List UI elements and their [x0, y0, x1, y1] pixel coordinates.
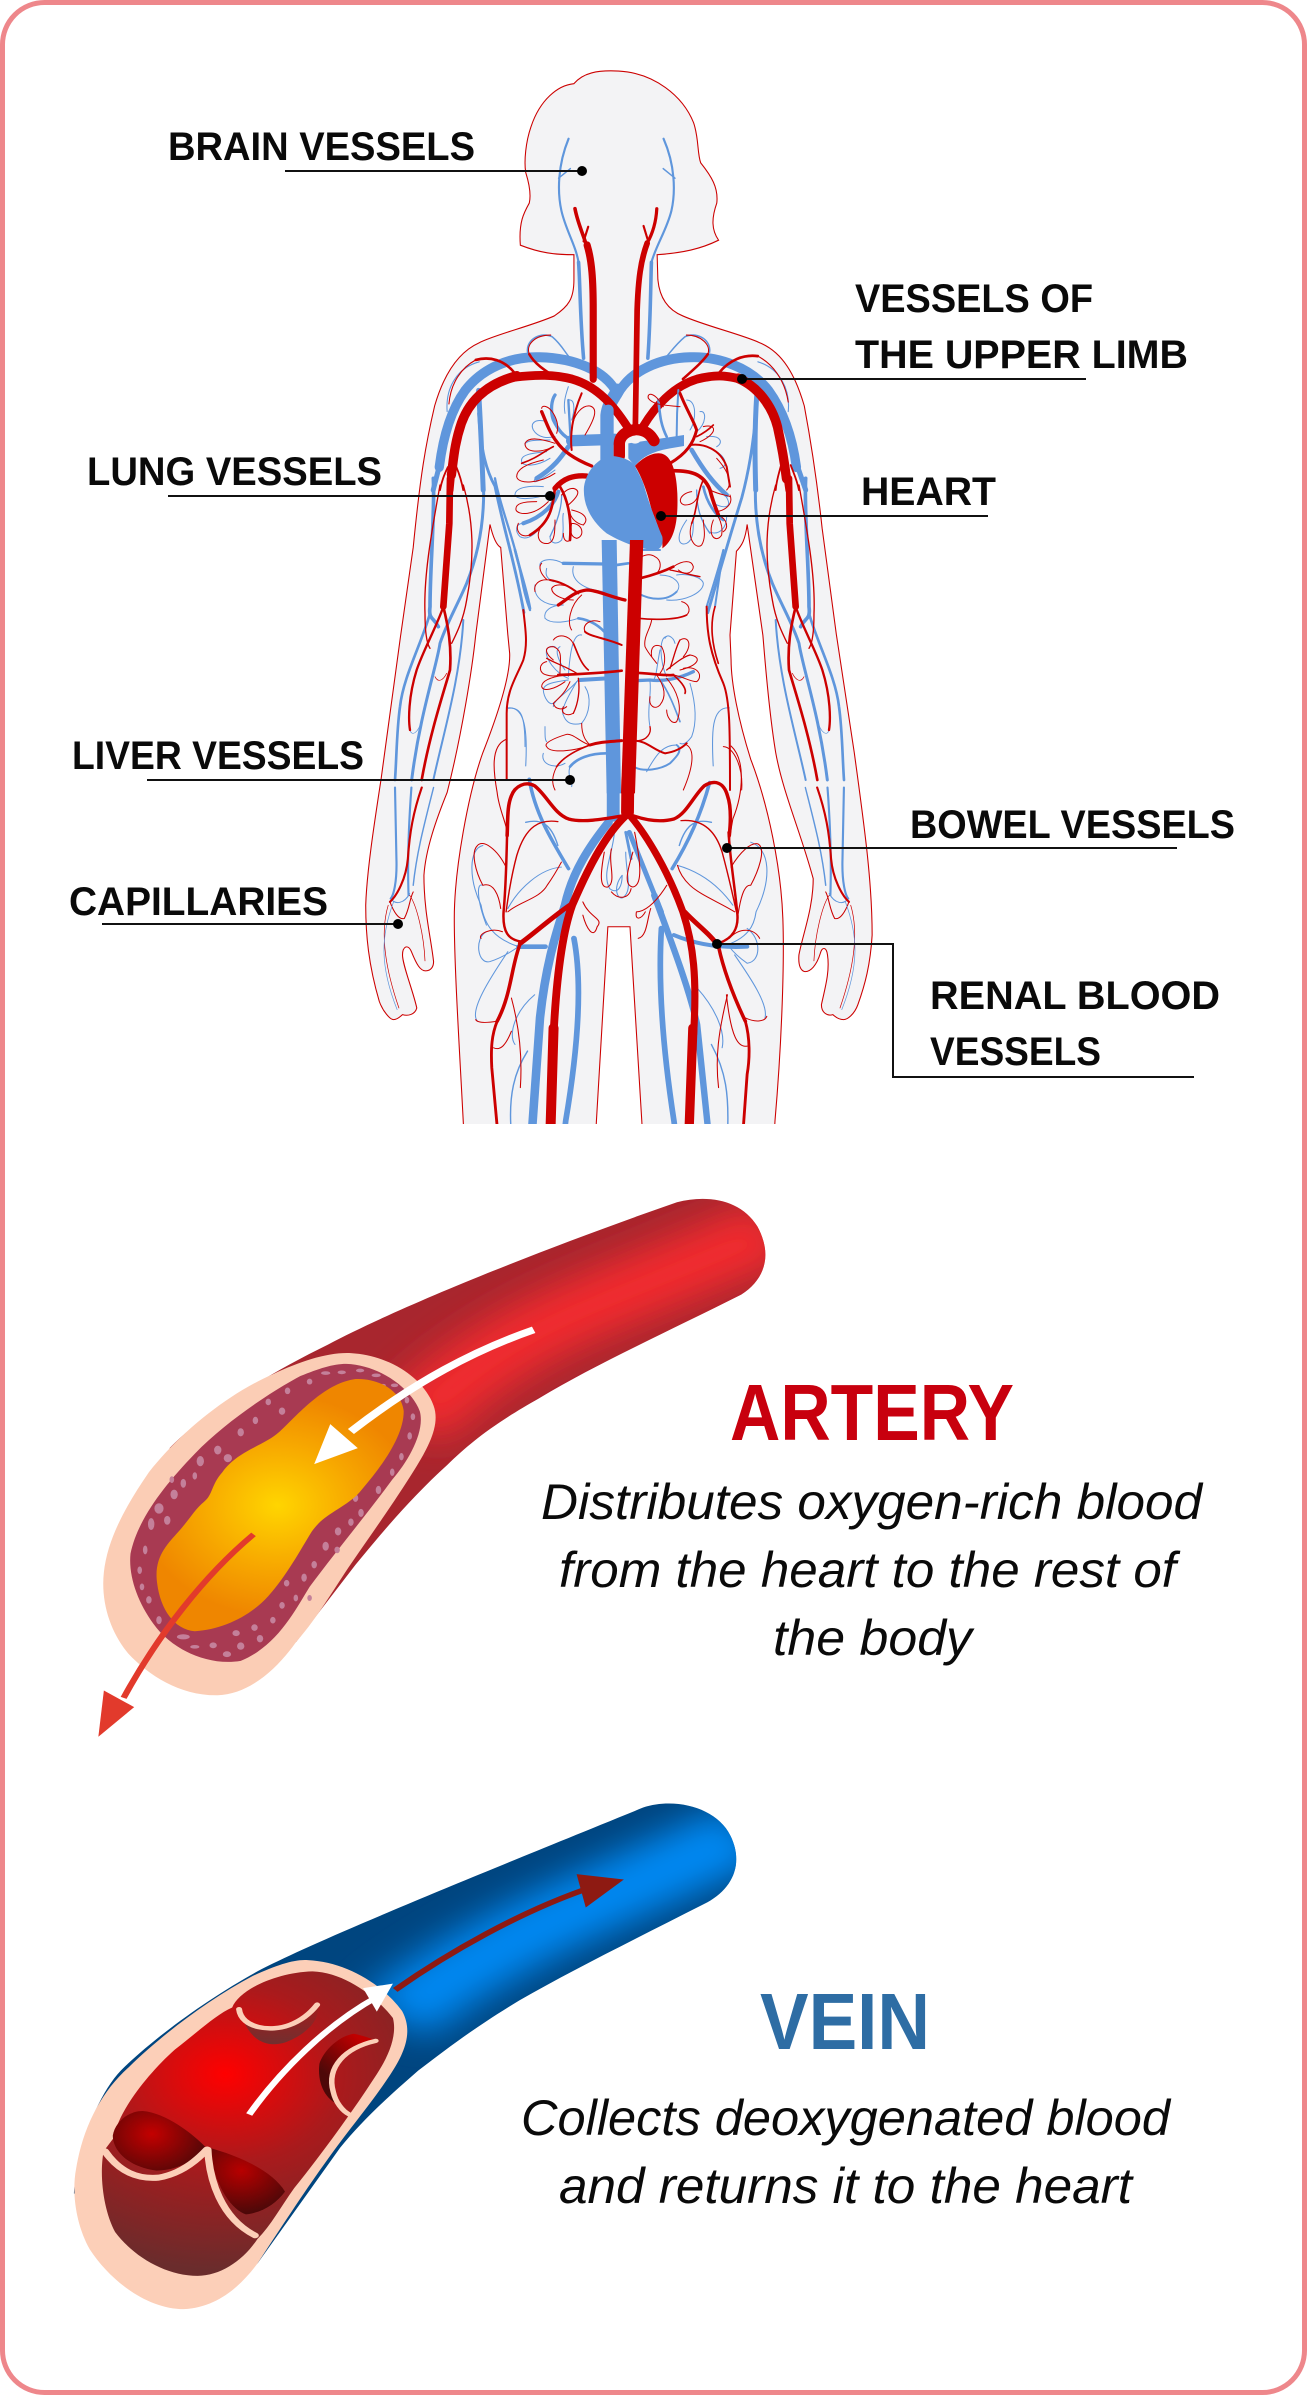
label: renal blood vessels: VESSELS — [930, 1030, 1101, 1074]
main iliac and leg arteries — [476, 779, 767, 1134]
vein description — [521, 2090, 1172, 2214]
dark red flow arrow — [395, 1874, 624, 1990]
artery description — [541, 1474, 1204, 1666]
artery muscle layer — [130, 1364, 421, 1662]
label: renal blood vessels — [930, 974, 1220, 1074]
vein illustration — [74, 1804, 736, 2310]
label: vessels of the upper limb — [855, 277, 1188, 377]
forearm vessels right — [755, 478, 844, 780]
artery outer wall — [103, 1353, 436, 1695]
valve pockets — [113, 2004, 377, 2214]
abdominal arteries — [535, 540, 742, 793]
label: heart: HEART — [861, 470, 996, 514]
abdomen vessels — [515, 540, 742, 793]
veins upper — [433, 139, 806, 612]
label: vessels of the upper limb: VESSELS OF — [855, 277, 1093, 321]
label: renal blood vessels: RENAL BLOOD — [930, 974, 1220, 1018]
vein tube — [74, 1804, 736, 2264]
hand vessels left — [384, 787, 434, 1010]
lower body: hands, pelvis and legs — [366, 613, 872, 1134]
artery illustration — [98, 1198, 766, 1737]
renal arteries — [474, 739, 762, 943]
heart — [584, 453, 677, 550]
vein description: Collects deoxygenated blood — [521, 2090, 1172, 2146]
right lung vessels — [648, 390, 731, 546]
forearm vessels left — [395, 478, 484, 780]
white flow arrow — [249, 1984, 393, 2114]
white flow arrow — [314, 1330, 534, 1464]
label: bowel vessels: BOWEL VESSELS — [910, 803, 1235, 847]
label: capillaries: CAPILLARIES — [69, 880, 328, 924]
plaque speckles — [137, 1369, 415, 1657]
artery description: from the heart to the rest of — [559, 1542, 1181, 1598]
side torso vessels left — [495, 478, 530, 780]
red flow arrow — [98, 1534, 254, 1737]
label: liver vessels: LIVER VESSELS — [72, 734, 364, 778]
valve leaflets — [105, 2005, 376, 2235]
artery tube — [170, 1198, 766, 1642]
upper body: head, shoulders and upper arms — [399, 71, 838, 650]
vein heading: VEIN — [760, 1977, 930, 2066]
left lung vessels — [515, 387, 595, 544]
abdominal veins — [515, 540, 723, 793]
human circulatory system diagram — [102, 71, 1194, 1134]
artery heading: ARTERY — [730, 1368, 1014, 1457]
great veins and pulmonary trunk — [572, 410, 684, 466]
label: lung vessels: LUNG VESSELS — [87, 450, 382, 494]
chest: lungs and heart — [515, 387, 731, 550]
aortic arch — [619, 430, 654, 456]
arteries upper — [440, 209, 799, 490]
vein lumen — [102, 1971, 394, 2276]
body silhouette upper — [399, 71, 838, 650]
pelvis and leg veins — [472, 708, 767, 1134]
label: vessels of the upper limb: THE UPPER LIMB — [855, 333, 1188, 377]
artery description: Distributes oxygen-rich blood — [541, 1474, 1204, 1530]
hand vessels right — [805, 787, 855, 1010]
artery description: the body — [773, 1610, 975, 1666]
artery lumen — [157, 1379, 404, 1631]
arms and legs silhouette — [366, 613, 872, 1134]
vein description: and returns it to the heart — [559, 2158, 1134, 2214]
leader lines and dots — [102, 166, 1194, 1077]
label: brain vessels: BRAIN VESSELS — [168, 125, 475, 169]
vein outer wall — [74, 1960, 407, 2309]
